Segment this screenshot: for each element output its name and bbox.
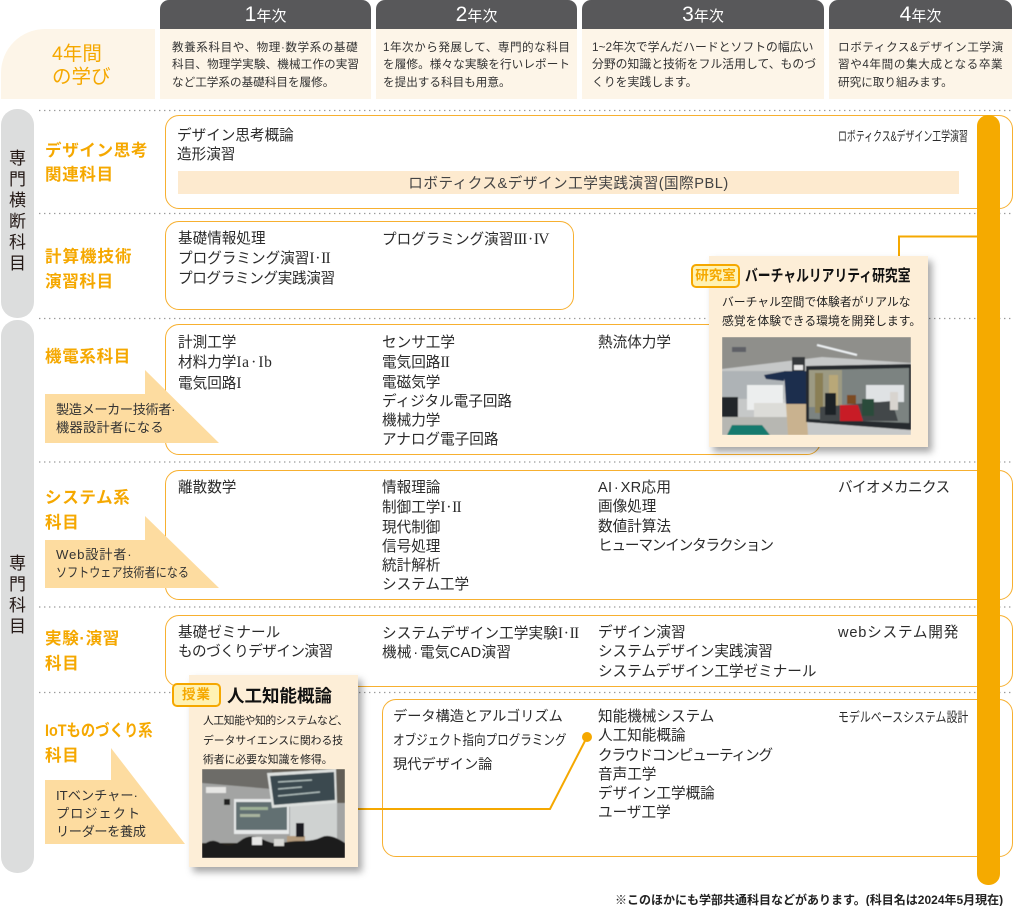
- year 4 description: [829, 29, 1012, 99]
- arrow: systems career: [45, 516, 219, 588]
- panel: design thinking courses: [165, 115, 1013, 209]
- year 2 description: を履修。様々な実験を行いレポート: [383, 58, 570, 71]
- year 1 description: [160, 29, 371, 99]
- courses: systems year 2: 統計解析: [382, 558, 440, 574]
- year 4 description: 習や4年間の集大成となる卒業: [838, 58, 1003, 71]
- courses: experiment year 1: [178, 624, 332, 660]
- courses: mechatronics year 2: [382, 334, 512, 448]
- career text: manufacturing engineers: [56, 402, 175, 435]
- courses: systems year 3: 画像処理: [598, 499, 656, 515]
- category: IoTものづくり系科目: [45, 722, 153, 764]
- career text: web and software engineers: ソフトウェア技術者になる: [56, 565, 189, 580]
- card title: 人工知能概論: [227, 686, 332, 706]
- courses: mechatronics year 2: 電磁気学: [382, 375, 440, 391]
- side label: 専門横断科目: 専: [9, 149, 26, 168]
- year 4 description: 研究に取り組みます。: [838, 76, 953, 89]
- courses: mechatronics year 1: [178, 334, 273, 392]
- panel: computing courses: [165, 221, 574, 310]
- courses: design year 1: [177, 127, 294, 163]
- side label: 専門横断科目: 断: [9, 212, 26, 231]
- courses: IoT year 3: ユーザ工学: [598, 805, 671, 821]
- callout card: virtual reality lab: [709, 256, 928, 447]
- career text: manufacturing engineers: 機器設計者になる: [56, 420, 164, 435]
- card title: バーチャルリアリティ研究室: [745, 268, 911, 285]
- career text: IT venture and project leader: [56, 788, 146, 839]
- side label: 専門科目: 門: [9, 575, 26, 594]
- side label: 専門横断科目: 門: [9, 170, 26, 189]
- courses: IoT year 2: データ構造とアルゴリズム: [393, 709, 563, 725]
- tag: 授業: 授業: [182, 687, 211, 702]
- category: 実験・演習科目: 実験·演習: [45, 630, 120, 648]
- category: デザイン思考関連科目: デザイン思考: [45, 142, 148, 160]
- courses: IoT year 3: デザイン工学概論: [598, 786, 715, 802]
- card description: [203, 714, 348, 766]
- category: システム系科目: [45, 488, 131, 532]
- courses: systems year 1: 離散数学: [178, 480, 236, 496]
- courses: computing year 1: プログラミング実践演習: [178, 271, 335, 287]
- side label: 専門科目: 科: [9, 596, 26, 615]
- courses: IoT year 2: [393, 708, 566, 773]
- courses: computing year 1: [178, 230, 335, 287]
- courses: experiment year 2: 機械·電気CAD演習: [382, 645, 511, 661]
- category: 機電系科目: 機電系科目: [45, 348, 131, 366]
- callout card: AI course: [189, 675, 358, 867]
- courses: mechatronics year 1: 電気回路I: [178, 375, 241, 392]
- courses: systems year 4: バイオメカニクス: [838, 480, 950, 496]
- year 1 header: 1年次: [245, 3, 286, 26]
- year 3 description: くりを実践します。: [592, 75, 697, 89]
- career text: manufacturing engineers: 製造メーカー技術者·: [56, 402, 175, 417]
- courses: mechatronics year 2: 機械力学: [382, 413, 440, 429]
- category: 計算機技術演習科目: 計算機技術: [45, 248, 132, 266]
- panel: IoT courses: [382, 699, 1013, 857]
- courses: systems year 2: 現代制御: [382, 520, 440, 536]
- category: デザイン思考関連科目: [45, 142, 148, 184]
- courses: IoT year 3: 音声工学: [598, 767, 656, 783]
- year 2 description: を提出する科目も用意。: [383, 76, 511, 89]
- category: 計算機技術演習科目: 演習科目: [45, 272, 114, 290]
- side label: 専門横断科目: 横: [9, 191, 26, 210]
- side label: 専門科目: 目: [9, 617, 26, 636]
- panel: systems courses: [165, 470, 1013, 600]
- career text: IT venture and project leader: リーダーを養成: [56, 824, 146, 839]
- courses: mechatronics year 1: 計測工学: [178, 335, 236, 351]
- courses: experiment year 2: [382, 625, 579, 661]
- category: 計算機技術演習科目: [45, 248, 132, 290]
- card description: 感覚を体験できる環境を開発します。: [722, 314, 921, 328]
- courses: design year 1: 造形演習: [177, 147, 235, 163]
- year 2 header: 2年次: [456, 3, 497, 26]
- courses: experiment year 3: [598, 624, 816, 680]
- courses: systems year 2: 情報理論: [382, 480, 440, 496]
- courses: design year 1: デザイン思考概論: [177, 128, 294, 144]
- category: IoTものづくり系科目: 科目: [45, 746, 79, 764]
- courses: computing year 1: 基礎情報処理: [178, 231, 266, 247]
- courses: experiment year 1: 基礎ゼミナール: [178, 625, 280, 641]
- band: international PBL: [178, 171, 959, 194]
- courses: experiment year 3: システムデザイン工学ゼミナール: [598, 664, 816, 680]
- year 1 description: 教養系科目や、物理·数学系の基礎: [172, 40, 358, 54]
- year 1 description: など工学系の基礎科目を履修。: [172, 76, 334, 89]
- career text: web and software engineers: [56, 547, 189, 580]
- year 3 description: 1~2年次で学んだハードとソフトの幅広い: [592, 40, 813, 54]
- tag: 授業: [172, 683, 221, 707]
- card description: 人工知能や知的システムなど、: [203, 715, 348, 727]
- panel: 4年間の学び heading: 4年間: [52, 43, 102, 65]
- year 4 description: ロボティクス&デザイン工学演: [838, 40, 1004, 54]
- photo: VR lab: [722, 337, 911, 435]
- career text: web and software engineers: Web設計者·: [56, 547, 132, 562]
- courses: systems year 3: [598, 480, 773, 554]
- courses: systems year 2: 制御工学I·II: [382, 499, 461, 516]
- courses: computing year 2: プログラミング演習III·IV: [382, 231, 549, 248]
- courses: design year 4: ロボティクス&デザイン工学演習: [838, 129, 968, 144]
- courses: IoT year 2: 現代デザイン論: [393, 757, 492, 773]
- category: システム系科目: 科目: [45, 514, 79, 532]
- vertical progress bar: [977, 115, 1000, 885]
- year 3 header: 3年次: [682, 3, 724, 26]
- category: 実験・演習科目: [45, 630, 120, 672]
- card description: [722, 295, 921, 328]
- courses: mechatronics year 2: センサ工学: [382, 335, 455, 351]
- category: システム系科目: システム系: [45, 489, 131, 507]
- courses: experiment year 4: webシステム開発: [838, 625, 959, 641]
- courses: mechatronics year 2: アナログ電子回路: [382, 432, 498, 448]
- arrow: mechatronics career: [45, 370, 219, 443]
- year 4 header: 4年次: [900, 3, 941, 26]
- courses: systems year 2: 信号処理: [382, 539, 440, 555]
- year 2 description: [376, 29, 577, 99]
- tag: 研究室: [691, 264, 740, 288]
- year 3 header: [582, 0, 824, 29]
- year 2 header: [376, 0, 577, 29]
- courses: mechatronics year 2: ディジタル電子回路: [382, 394, 512, 410]
- courses: computing year 1: プログラミング演習I·II: [178, 250, 330, 267]
- courses: IoT year 3: クラウドコンピューティング: [598, 748, 772, 764]
- side label: 専門横断科目: 目: [9, 254, 26, 273]
- category: IoTものづくり系科目: IoTものづくり系: [45, 722, 153, 740]
- card description: バーチャル空間で体験者がリアルな: [722, 295, 911, 309]
- courses: systems year 3: 数値計算法: [598, 519, 671, 535]
- courses: mechatronics year 1: 材料力学Ia·Ib: [178, 354, 273, 371]
- courses: IoT year 3: 知能機械システム: [598, 709, 714, 725]
- courses: experiment year 3: デザイン演習: [598, 625, 686, 641]
- side label: 専門科目: [1, 320, 34, 873]
- year 1 header: [160, 0, 371, 29]
- side label: 専門横断科目: 科: [9, 233, 26, 252]
- year 3 description: 分野の知識と技術をフル活用して、ものづ: [592, 57, 816, 71]
- tag: 研究室: 研究室: [695, 268, 736, 283]
- courses: mechatronics year 3: 熱流体力学: [598, 335, 671, 351]
- photo: classroom: [202, 769, 345, 858]
- career text: IT venture and project leader: ITベンチャー·: [56, 788, 138, 803]
- courses: IoT year 4: モデルベースシステム設計: [838, 710, 968, 725]
- arrow: IoT career: [45, 748, 185, 844]
- panel: mechatronics courses: [165, 324, 821, 455]
- courses: systems year 3: ヒューマンインタラクション: [598, 538, 773, 554]
- courses: IoT year 3: 人工知能概論: [598, 728, 686, 744]
- year 2 description: 1年次から発展して、専門的な科目: [383, 40, 570, 54]
- panel: 4年間の学び heading: の学び: [52, 66, 111, 88]
- year 3 description: [582, 29, 824, 99]
- panel: 4年間の学び heading: [1, 29, 155, 99]
- courses: mechatronics year 2: 電気回路II: [382, 354, 449, 371]
- career text: IT venture and project leader: プロジェクト: [56, 806, 141, 821]
- courses: systems year 3: AI·XR応用: [598, 480, 671, 496]
- courses: IoT year 2: オブジェクト指向プログラミング: [393, 733, 566, 749]
- courses: experiment year 1: ものづくりデザイン演習: [178, 644, 332, 660]
- courses: IoT year 3: [598, 708, 772, 821]
- side label: 専門科目: 専: [9, 554, 26, 573]
- side label: 専門横断科目: [1, 109, 34, 318]
- category: 実験・演習科目: 科目: [45, 654, 79, 672]
- courses: experiment year 3: システムデザイン実践演習: [598, 644, 773, 660]
- courses: experiment year 2: システムデザイン工学実験I·II: [382, 625, 578, 642]
- card description: データサイエンスに関わる技: [203, 734, 343, 746]
- courses: systems year 2: システム工学: [382, 577, 469, 593]
- card description: 術者に必要な知識を修得。: [203, 754, 333, 766]
- year 4 header: [829, 0, 1012, 29]
- panel: experiment and practice courses: [165, 615, 1013, 687]
- year 1 description: 科目、物理学実験、機械工作の実習: [172, 58, 359, 71]
- courses: systems year 2: [382, 479, 469, 593]
- category: デザイン思考関連科目: 関連科目: [45, 166, 114, 184]
- band: international PBL: ロボティクス&デザイン工学実践演習(国際PBL): [408, 176, 729, 192]
